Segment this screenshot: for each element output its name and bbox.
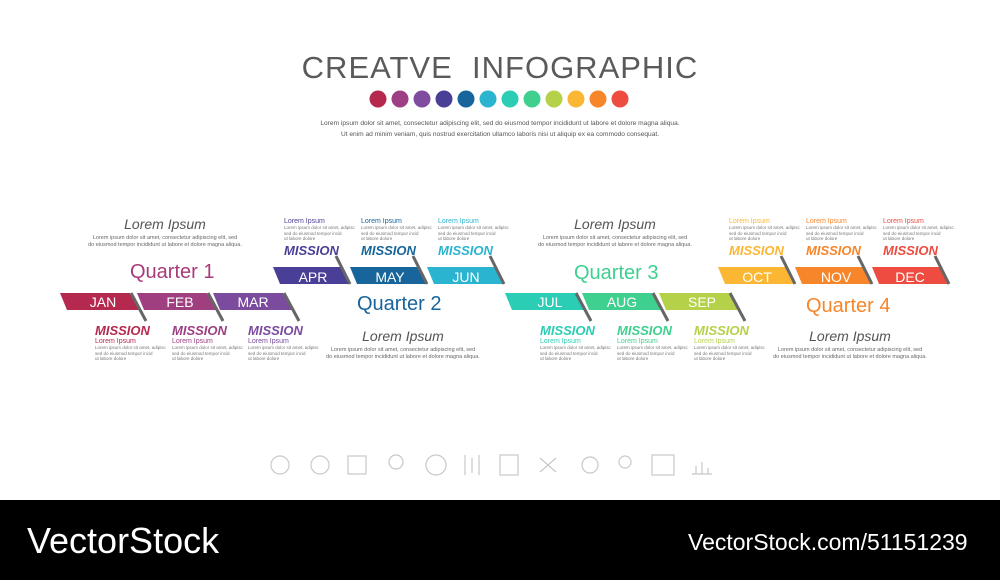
text: sed do eiusmod tempor incid bbox=[172, 350, 230, 356]
text: Lorem ipsum dolor sit amet, consectetur adipiscing elit, sed bbox=[93, 235, 237, 241]
text: Lorem Ipsum bbox=[124, 216, 206, 232]
text: Lorem Ipsum bbox=[883, 218, 924, 225]
text: do eiusmod tempor incididunt ut labore et dolore magna aliqua. bbox=[538, 242, 692, 248]
text: ut labore dolore bbox=[438, 236, 469, 241]
text: sed do eiusmod tempor incid bbox=[617, 350, 675, 356]
upper missions bbox=[284, 218, 954, 258]
text: do eiusmod tempor incididunt ut labore et dolore magna aliqua. bbox=[326, 354, 480, 360]
text: Lorem Ipsum bbox=[694, 338, 735, 345]
text: Lorem Ipsum bbox=[172, 338, 213, 345]
subtitle: Lorem ipsum dolor sit amet, consectetur adipiscing elit, sed do eiusmod tempor incididunt ut labore et dolore magna aliqua. bbox=[320, 120, 680, 127]
timeline ribbons: NOV bbox=[821, 269, 852, 285]
text: Lorem Ipsum bbox=[284, 218, 325, 225]
timeline ribbons: JUL bbox=[538, 294, 563, 310]
text: Lorem ipsum dolor sit amet, adipisc bbox=[806, 225, 877, 230]
text: Quarter 2 bbox=[357, 293, 441, 315]
quarter descriptions bbox=[88, 216, 927, 360]
timeline ribbons: FEB bbox=[166, 294, 194, 310]
timeline ribbons: SEP bbox=[688, 294, 716, 310]
timeline ribbons: DEC bbox=[895, 269, 925, 285]
text: MISSION bbox=[95, 323, 150, 338]
text: Quarter 1 bbox=[130, 261, 214, 283]
text: ut labore dolore bbox=[617, 356, 648, 361]
timeline ribbons: APR bbox=[299, 269, 327, 285]
text: MISSION bbox=[540, 323, 595, 338]
text: ut labore dolore bbox=[248, 356, 279, 361]
timeline ribbons bbox=[60, 255, 950, 322]
subtitle: Ut enim ad minim veniam, quis nostrud exercitation ullamco laboris nisi ut aliquip ex ea commodo consequat. bbox=[341, 131, 659, 138]
quarter labels bbox=[130, 261, 890, 317]
text: Lorem ipsum dolor sit amet, consectetur adipiscing elit, sed bbox=[543, 235, 687, 241]
text: do eiusmod tempor incididunt ut labore et dolore magna aliqua. bbox=[773, 354, 927, 360]
footer bar bbox=[0, 500, 1000, 580]
text: ut labore dolore bbox=[361, 236, 392, 241]
text: Lorem ipsum dolor sit amet, adipisc bbox=[540, 345, 611, 350]
text: Lorem Ipsum bbox=[95, 338, 136, 345]
timeline ribbons: MAR bbox=[237, 294, 269, 310]
timeline ribbons: JAN bbox=[90, 294, 116, 310]
text: Lorem ipsum dolor sit amet, consectetur adipiscing elit, sed bbox=[778, 347, 922, 353]
text: MISSION bbox=[617, 323, 672, 338]
text: Lorem Ipsum bbox=[540, 338, 581, 345]
timeline ribbons: OCT bbox=[742, 269, 772, 285]
text: ut labore dolore bbox=[729, 236, 760, 241]
text: sed do eiusmod tempor incid bbox=[284, 230, 342, 236]
text: MISSION bbox=[694, 323, 749, 338]
text: Lorem ipsum dolor sit amet, adipisc bbox=[729, 225, 800, 230]
text: Lorem Ipsum bbox=[617, 338, 658, 345]
text: ut labore dolore bbox=[95, 356, 126, 361]
icon row bbox=[270, 454, 712, 476]
title: CREATVE INFOGRAPHIC bbox=[302, 50, 698, 85]
text: ut labore dolore bbox=[284, 236, 315, 241]
text: MISSION bbox=[883, 242, 938, 258]
text: Quarter 3 bbox=[574, 262, 658, 284]
text: sed do eiusmod tempor incid bbox=[729, 230, 787, 236]
text: MISSION bbox=[729, 242, 784, 258]
text: MISSION bbox=[284, 242, 339, 258]
text: ut labore dolore bbox=[172, 356, 203, 361]
timeline ribbons: MAY bbox=[375, 269, 405, 285]
text: Lorem ipsum dolor sit amet, adipisc bbox=[248, 345, 319, 350]
text: Lorem ipsum dolor sit amet, adipisc bbox=[95, 345, 166, 350]
timeline ribbons: AUG bbox=[607, 294, 637, 310]
text: Lorem Ipsum bbox=[362, 328, 444, 344]
text: ut labore dolore bbox=[694, 356, 725, 361]
timeline ribbons: JUN bbox=[452, 269, 480, 285]
text: Lorem Ipsum bbox=[729, 218, 770, 225]
text: Lorem Ipsum bbox=[438, 218, 479, 225]
text: Lorem ipsum dolor sit amet, adipisc bbox=[694, 345, 765, 350]
text: Lorem ipsum dolor sit amet, adipisc bbox=[361, 225, 432, 230]
text: sed do eiusmod tempor incid bbox=[806, 230, 864, 236]
text: sed do eiusmod tempor incid bbox=[883, 230, 941, 236]
text: Lorem ipsum dolor sit amet, adipisc bbox=[438, 225, 509, 230]
text: ut labore dolore bbox=[806, 236, 837, 241]
text: Quarter 4 bbox=[806, 295, 890, 317]
text: sed do eiusmod tempor incid bbox=[438, 230, 496, 236]
brand left: VectorStock bbox=[27, 520, 219, 561]
text: Lorem Ipsum bbox=[809, 328, 891, 344]
text: Lorem Ipsum bbox=[806, 218, 847, 225]
subtitle bbox=[320, 120, 680, 138]
text: sed do eiusmod tempor incid bbox=[248, 350, 306, 356]
text: Lorem ipsum dolor sit amet, adipisc bbox=[617, 345, 688, 350]
text: ut labore dolore bbox=[883, 236, 914, 241]
text: sed do eiusmod tempor incid bbox=[694, 350, 752, 356]
text: MISSION bbox=[361, 242, 416, 258]
text: do eiusmod tempor incididunt ut labore et dolore magna aliqua. bbox=[88, 242, 242, 248]
text: Lorem ipsum dolor sit amet, adipisc bbox=[284, 225, 355, 230]
text: sed do eiusmod tempor incid bbox=[540, 350, 598, 356]
text: MISSION bbox=[806, 242, 861, 258]
text: Lorem Ipsum bbox=[248, 338, 289, 345]
text: Lorem Ipsum bbox=[361, 218, 402, 225]
text: ut labore dolore bbox=[540, 356, 571, 361]
text: MISSION bbox=[438, 242, 493, 258]
text: Lorem ipsum dolor sit amet, adipisc bbox=[172, 345, 243, 350]
brand right: VectorStock.com/51151239 bbox=[688, 529, 968, 555]
text: Lorem ipsum dolor sit amet, consectetur adipiscing elit, sed bbox=[331, 347, 475, 353]
text: sed do eiusmod tempor incid bbox=[361, 230, 419, 236]
text: MISSION bbox=[248, 323, 303, 338]
lower missions bbox=[95, 323, 765, 361]
text: sed do eiusmod tempor incid bbox=[95, 350, 153, 356]
text: Lorem Ipsum bbox=[574, 216, 656, 232]
text: Lorem ipsum dolor sit amet, adipisc bbox=[883, 225, 954, 230]
color dots bbox=[370, 90, 628, 108]
text: MISSION bbox=[172, 323, 227, 338]
